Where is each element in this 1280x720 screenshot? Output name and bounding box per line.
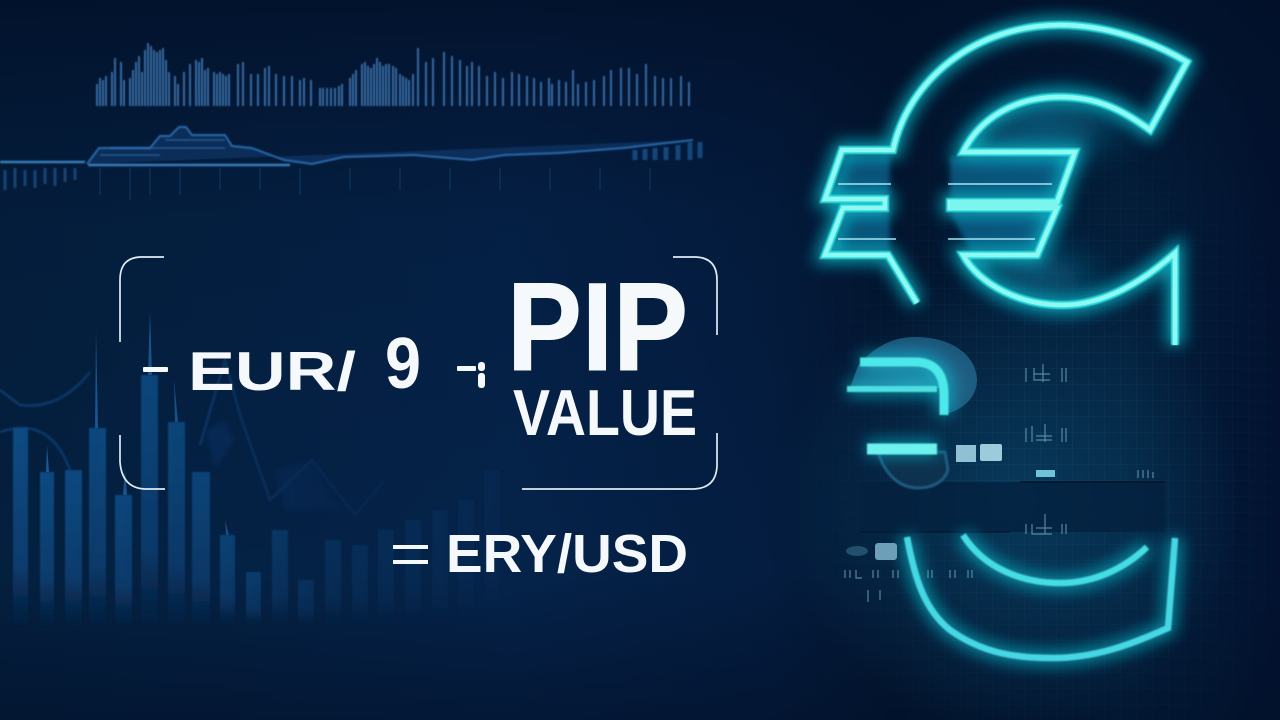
chart: skyline line trace xyxy=(0,127,700,200)
frame: rounded corner brackets xyxy=(120,257,717,489)
icon: neon euro symbol xyxy=(825,25,1187,345)
tiny data tick clusters xyxy=(845,364,1153,602)
equation: EUR/ term: EUR/ xyxy=(188,340,356,402)
chart: top waveform bars xyxy=(97,43,689,106)
heading: PIP: PIP xyxy=(507,258,688,397)
panel: lower glitched euro fragment xyxy=(845,337,1175,658)
small data blocks xyxy=(846,444,1055,560)
heading: VALUE: VALUE xyxy=(513,376,697,449)
equation: EUR/ term xyxy=(143,340,356,402)
glyph: garbled 9: 9 xyxy=(385,324,421,404)
glyph: minus hook symbol xyxy=(457,362,485,388)
chart: lower-left candlestick bars xyxy=(0,310,500,625)
equation: equals ERY/USD: ERY/USD xyxy=(446,524,688,584)
lower neon arcs xyxy=(907,535,1175,658)
